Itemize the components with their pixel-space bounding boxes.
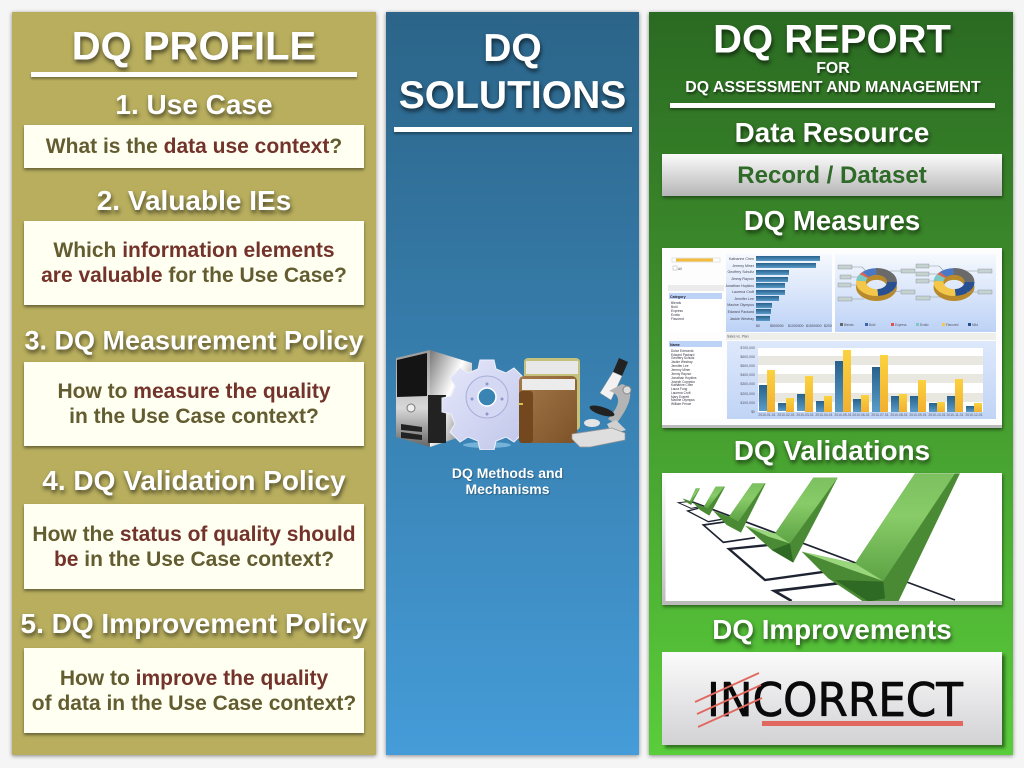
text box: use case question: What is the data use context?	[46, 135, 342, 158]
name list: Edward Packard	[671, 353, 695, 357]
column chart: sales vs plan: $200,000	[740, 392, 755, 396]
name list: Maxine Olympus	[671, 398, 695, 402]
name list: Dulce Edmonds	[671, 349, 694, 353]
dashboard screenshot	[662, 248, 1002, 428]
column chart: sales vs plan: 2010-02-01	[777, 413, 795, 417]
horizontal bar chart: $200	[824, 324, 832, 328]
donut charts panel: Mild	[972, 323, 978, 327]
panel: DQ profile	[12, 12, 376, 755]
text box: validation question: be in the Use Case context?	[54, 548, 334, 570]
name list: Jeremy Miner	[671, 368, 691, 372]
donut charts panel: Exotic	[920, 323, 929, 327]
slider control: All	[678, 267, 682, 271]
category list: Blends	[671, 301, 681, 305]
name list: Laura Fung	[671, 387, 688, 391]
checklist image	[662, 473, 1002, 605]
checkbox outlines	[678, 502, 955, 601]
text box: measurement question: in the Use Case context?	[69, 405, 319, 428]
text box: measurement question: How to measure the quality	[57, 380, 331, 403]
category list: Flavored	[671, 317, 684, 321]
donut charts panel: Blends	[844, 323, 854, 327]
caption: DQ Methods and Mechanisms: Mechanisms	[465, 481, 550, 497]
horizontal bar chart: $0	[756, 324, 760, 328]
red strike lines	[695, 673, 762, 727]
red underline	[762, 721, 963, 726]
name list: Laurena Croft	[671, 391, 691, 395]
box: Record / Dataset: Record / Dataset	[737, 162, 927, 189]
panel: DQ report	[649, 12, 1013, 755]
subtitle: for DQ assessment and management: DQ ASSESSMENT AND MANAGEMENT	[685, 79, 981, 96]
column chart: sales vs plan: 2010-05-01	[834, 413, 852, 417]
caption: DQ Methods and Mechanisms	[452, 465, 564, 497]
heading: 3. DQ Measurement Policy: 3. DQ Measurement Policy	[24, 326, 364, 356]
column chart: sales vs plan: $100,000	[740, 401, 755, 405]
column chart: sales vs plan: $700,000	[740, 346, 755, 350]
word: INCORRECT: INCORRECT	[707, 673, 964, 727]
title: DQ Solutions	[399, 27, 628, 117]
text box: validation question: How the status of quality should	[32, 522, 356, 546]
name list: Jonathan Hopkins	[671, 376, 697, 380]
donut chart left	[861, 271, 892, 298]
horizontal bar chart: Laurena Croft	[732, 290, 754, 294]
icon: gear	[442, 360, 532, 450]
title: DQ Solutions: DQ	[483, 27, 542, 70]
horizontal bar chart: Jennifer Lee	[734, 297, 754, 301]
horizontal bar chart	[725, 254, 832, 332]
column chart: sales vs plan	[727, 341, 996, 419]
name list: Jackie Westray	[671, 360, 693, 364]
text box: validation question	[24, 504, 364, 589]
text box: improvement question	[24, 648, 364, 733]
horizontal bar chart: Jackie Westray	[730, 317, 754, 321]
donut charts panel: Flavored	[946, 323, 959, 327]
text box: use case question	[24, 125, 364, 168]
column chart: sales vs plan: $0	[751, 410, 755, 414]
category list: Exotic	[671, 313, 680, 317]
name list: Name	[670, 343, 680, 347]
icon: microscope	[572, 358, 631, 447]
text box: measurement question	[24, 362, 364, 446]
category list: Category	[670, 295, 686, 299]
horizontal bar chart: Edward Packard	[728, 310, 754, 314]
horizontal bar chart: Geoffery Schultz	[727, 270, 754, 274]
checkmarks	[682, 473, 960, 605]
panel: DQ solutions	[386, 12, 639, 755]
text box: improvement question: How to improve the quality	[60, 666, 328, 690]
horizontal bar chart: Katharine Chen	[729, 257, 754, 261]
column chart: sales vs plan: 2010-12-01	[965, 413, 983, 417]
column chart: sales vs plan: $400,000	[740, 373, 755, 377]
heading: DQ Measures: DQ Measures	[744, 205, 920, 236]
heading: 4. DQ Validation Policy: 4. DQ Validation Policy	[42, 465, 346, 496]
horizontal bar chart: $1000000	[788, 324, 804, 328]
column chart: sales vs plan: 2010-11-01	[946, 413, 964, 417]
horizontal bar chart: Jimmy Raynor	[731, 277, 755, 281]
column chart: sales vs plan: 2010-09-01	[909, 413, 927, 417]
icon: books	[519, 358, 580, 443]
name list	[669, 341, 722, 419]
name list: Jimmy Raynor	[671, 372, 692, 376]
sales vs plan heading: Sales vs. Plan	[727, 334, 749, 338]
corrected word image	[662, 652, 1002, 745]
column chart: sales vs plan: 2010-03-01	[796, 413, 814, 417]
donut chart right	[938, 271, 970, 298]
column chart: sales vs plan: 2010-06-01	[852, 413, 870, 417]
column chart: sales vs plan: $600,000	[740, 355, 755, 359]
heading: 1. Use Case: 1. Use Case	[115, 89, 273, 120]
text box: valuable IEs question	[24, 221, 364, 305]
heading: DQ Improvements: DQ Improvements	[712, 614, 952, 645]
name list: William Pence	[671, 402, 691, 406]
column chart: sales vs plan: 2010-01-01	[758, 413, 776, 417]
text box: valuable IEs question: Which information elements	[53, 239, 335, 262]
category list	[669, 293, 722, 332]
heading: Data Resource: Data Resource	[735, 117, 929, 148]
heading: DQ Validations: DQ Validations	[734, 435, 930, 466]
icon group: methods and mechanisms	[396, 350, 632, 450]
title: DQ Report: DQ REPORT	[713, 18, 951, 62]
horizontal bar chart: Jonathan Hopkins	[725, 284, 754, 288]
column chart: sales vs plan: 2010-10-01	[928, 413, 946, 417]
sales vs plan heading	[726, 333, 996, 340]
category list: Express	[671, 309, 683, 313]
name list: Jennifer Lee	[671, 364, 689, 368]
column chart: sales vs plan: $500,000	[740, 364, 755, 368]
column chart: sales vs plan: $300,000	[740, 382, 755, 386]
box: Record / Dataset	[662, 154, 1002, 196]
subtitle: for DQ assessment and management: FOR	[816, 60, 850, 77]
caption: DQ Methods and Mechanisms: DQ Methods and	[452, 465, 563, 481]
column chart: sales vs plan: 2010-04-01	[815, 413, 833, 417]
name list: Geoffery Schultz	[671, 356, 695, 360]
text box: improvement question: of data in the Use Case context?	[32, 692, 356, 714]
donut charts panel: Express	[895, 323, 907, 327]
slider control	[668, 258, 724, 291]
horizontal bar chart: $500000	[770, 324, 784, 328]
subtitle: for DQ assessment and management	[685, 60, 982, 98]
column chart: sales vs plan: 2010-07-01	[871, 413, 889, 417]
horizontal bar chart: Maxine Olympus	[727, 303, 754, 307]
title: DQ Profile: DQ PROFILE	[72, 24, 316, 68]
donut charts panel	[835, 254, 996, 332]
category list: Bold	[671, 305, 678, 309]
donut charts panel: Bold	[869, 323, 876, 327]
heading: 5. DQ Improvement Policy: 5. DQ Improvement Policy	[20, 608, 368, 639]
heading: 2. Valuable IEs: 2. Valuable IEs	[97, 185, 291, 216]
name list: Mary Everett	[671, 395, 689, 399]
title: DQ Solutions: SOLUTIONS	[399, 74, 626, 117]
text box: valuable IEs question: are valuable for the Use Case?	[41, 264, 347, 287]
horizontal bar chart: Jeremy Miner	[732, 264, 755, 268]
horizontal bar chart: $1500000	[806, 324, 822, 328]
icon: computer tower	[396, 350, 472, 447]
name list: Katharine Chen	[671, 383, 693, 387]
name list: Joseph Compton	[671, 380, 695, 384]
column chart: sales vs plan: 2010-08-01	[890, 413, 908, 417]
